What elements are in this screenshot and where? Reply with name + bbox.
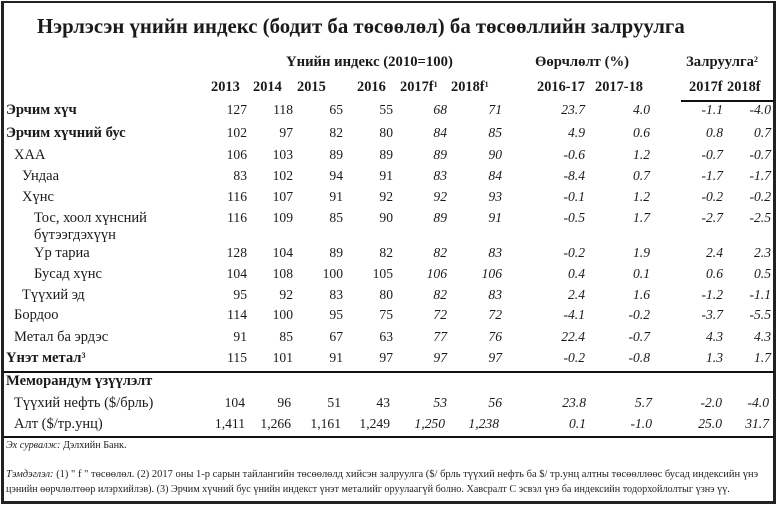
row: food — [22, 189, 771, 205]
row: metals and minerals: -0.7 — [628, 329, 650, 344]
row: fertilizer: 72 — [488, 307, 502, 322]
row: fertilizer: -3.7 — [701, 307, 723, 322]
row: other food: 0.4 — [568, 266, 585, 281]
row: crude oil — [14, 395, 769, 411]
row: energy: 118 — [273, 102, 293, 117]
row: metals and minerals: 91 — [233, 329, 247, 344]
row: raw materials: 80 — [379, 287, 393, 302]
row: other food: 105 — [373, 266, 393, 281]
title: Нэрлэсэн үнийн индекс (бодит ба төсөөлөл) ба төсөөллийн залруулга — [37, 15, 685, 38]
footer rule — [3, 436, 774, 438]
row: oils and meals: -0.5 — [563, 210, 585, 225]
row: non-energy: 80 — [379, 125, 393, 140]
row: non-energy: 0.6 — [633, 125, 650, 140]
row: precious metals: 101 — [273, 350, 293, 365]
row: fertilizer: Бордоо — [14, 307, 59, 323]
row: other food: 100 — [323, 266, 343, 281]
row: crude oil: 53 — [433, 395, 447, 410]
row: grains: 83 — [488, 245, 502, 260]
row: beverages: -8.4 — [563, 168, 585, 183]
row: crude oil: Түүхий нефть ($/брль) — [14, 395, 153, 411]
row: agriculture: -0.7 — [749, 147, 771, 162]
row: energy: 68 — [433, 102, 447, 117]
row: agriculture: 1.2 — [633, 147, 650, 162]
row: fertilizer: -5.5 — [749, 307, 771, 322]
header: revision: Залруулга2 — [686, 54, 758, 70]
row: other food: 104 — [227, 266, 247, 281]
revision header rule — [681, 100, 774, 102]
row: food: 116 — [227, 189, 247, 204]
row: memorandum heading: Меморандум үзүүлэлт — [6, 373, 152, 389]
row: gold: 1,249 — [359, 416, 390, 431]
row: metals and minerals: 22.4 — [561, 329, 585, 344]
row: other food: 0.6 — [706, 266, 723, 281]
row: raw materials: Түүхий эд — [22, 287, 85, 303]
row: crude oil: 43 — [376, 395, 390, 410]
row: other food: 0.1 — [633, 266, 650, 281]
year 2016: 2016 — [357, 79, 386, 95]
row: grains: 104 — [273, 245, 293, 260]
row: energy: Эрчим хүч — [6, 102, 77, 118]
row: precious metals: 97 — [433, 350, 447, 365]
row: oils and meals: 116 — [227, 210, 247, 225]
row: beverages: 0.7 — [633, 168, 650, 183]
row: non-energy — [6, 125, 772, 141]
row: grains: 2.3 — [754, 245, 771, 260]
row: oils and meals: 89 — [433, 210, 447, 225]
row: non-energy: Эрчим хүчний бус — [6, 125, 126, 141]
row: energy — [6, 102, 771, 118]
row: grains: 128 — [227, 245, 247, 260]
row: metals and minerals: 63 — [379, 329, 393, 344]
row: raw materials: 83 — [488, 287, 502, 302]
year 2013: 2013 — [211, 79, 240, 95]
row: raw materials: -1.2 — [701, 287, 723, 302]
footnotes — [6, 469, 758, 495]
year 2014: 2014 — [253, 79, 282, 95]
row: gold: 1,238 — [468, 416, 499, 431]
row: metals and minerals — [14, 329, 771, 345]
data table — [6, 102, 772, 366]
row: raw materials — [22, 287, 771, 303]
row: beverages: 84 — [488, 168, 502, 183]
row: beverages — [22, 168, 772, 184]
footnote line 2: цэнийн өөрчлөлтөөр илэрхийлэв). (3) Эрчим хүчний бус үнийн индекст үнэт металийг оруулаагүй болно. Хавсралт С эсвэл үнэ ба индексийн тодорхойлолтыг үзнэ үү. — [6, 484, 730, 495]
row: crude oil: 51 — [327, 395, 341, 410]
row: oils and meals — [34, 210, 771, 226]
row: energy: 65 — [329, 102, 343, 117]
row: beverages: -1.7 — [749, 168, 771, 183]
row: food: 93 — [488, 189, 502, 204]
row: fertilizer: 75 — [379, 307, 393, 322]
row: non-energy: 85 — [488, 125, 502, 140]
row: grains: 82 — [433, 245, 447, 260]
row: gold: 0.1 — [569, 416, 586, 431]
row: energy: 71 — [488, 102, 502, 117]
row: food: Хүнс — [22, 189, 54, 205]
period 2017-18: 2017-18 — [595, 79, 643, 95]
row: raw materials: 92 — [279, 287, 293, 302]
footnote line 1: Тэмдэглэл: (1) " f " төсөөлөл. (2) 2017 оны 1-р сарын тайлангийн төсөөлөлд хийсэн залруулга ($/ брль түүхий нефть ба $/ тр.унц алтны төсөөллөөс бусад индексийн үнэ — [6, 469, 758, 480]
year headers — [211, 79, 761, 95]
row: metals and minerals: 76 — [488, 329, 502, 344]
row: agriculture: -0.6 — [563, 147, 585, 162]
row: gold: 1,411 — [215, 416, 245, 431]
row: crude oil: 104 — [225, 395, 245, 410]
row: oils and meals: 91 — [488, 210, 502, 225]
row: beverages: 83 — [433, 168, 447, 183]
row: food: 1.2 — [633, 189, 650, 204]
row: beverages: -1.7 — [701, 168, 723, 183]
row: energy: 127 — [227, 102, 247, 117]
row: energy: 23.7 — [561, 102, 585, 117]
row: oils and meals: -2.7 — [701, 210, 723, 225]
source note: Эх сурвалж: Дэлхийн Банк. — [6, 440, 127, 451]
row: gold — [14, 416, 770, 432]
row: food: -0.2 — [749, 189, 771, 204]
row: non-energy: 97 — [279, 125, 293, 140]
row: precious metals: -0.2 — [563, 350, 585, 365]
row: non-energy: 82 — [329, 125, 343, 140]
row: precious metals: 1.3 — [706, 350, 723, 365]
row: precious metals — [6, 350, 772, 366]
row: non-energy: 0.7 — [754, 125, 771, 140]
row: agriculture: 89 — [433, 147, 447, 162]
row: beverages: 94 — [329, 168, 343, 183]
row: metals and minerals: 77 — [433, 329, 447, 344]
row label continuation: бүтээгдэхүүн — [34, 227, 116, 243]
row: gold: -1.0 — [630, 416, 652, 431]
revision 2017f: 2017f — [689, 79, 723, 95]
row: metals and minerals: 4.3 — [754, 329, 771, 344]
row: crude oil: 23.8 — [562, 395, 586, 410]
row: non-energy: 0.8 — [706, 125, 723, 140]
row: beverages: 91 — [379, 168, 393, 183]
row: beverages: 83 — [233, 168, 247, 183]
row: gold: Алт ($/тр.унц) — [14, 416, 103, 432]
row: other food: 108 — [273, 266, 293, 281]
row: raw materials: 2.4 — [568, 287, 585, 302]
row: oils and meals: 90 — [379, 210, 393, 225]
row: grains: -0.2 — [563, 245, 585, 260]
row: other food: 106 — [427, 266, 447, 281]
row: precious metals: Үнэт метал3 — [6, 350, 85, 366]
row: other food: 0.5 — [754, 266, 771, 281]
row: grains — [34, 245, 771, 261]
row: precious metals: 115 — [227, 350, 247, 365]
memorandum section — [6, 373, 770, 432]
row: food: 107 — [273, 189, 293, 204]
row: oils and meals: Тос, хоол хүнсний — [34, 210, 147, 226]
row: raw materials: 82 — [433, 287, 447, 302]
row: energy: -1.1 — [701, 102, 723, 117]
row: energy: 55 — [379, 102, 393, 117]
row: other food: Бусад хүнс — [34, 266, 102, 282]
row: precious metals: 97 — [379, 350, 393, 365]
row: other food: 106 — [482, 266, 502, 281]
row: gold: 1,161 — [310, 416, 341, 431]
row: raw materials: 95 — [233, 287, 247, 302]
row: gold: 31.7 — [745, 416, 769, 431]
row: precious metals: -0.8 — [628, 350, 650, 365]
row: oils and meals: 109 — [273, 210, 293, 225]
row: grains: 82 — [379, 245, 393, 260]
row: raw materials: 83 — [329, 287, 343, 302]
row: non-energy: 102 — [227, 125, 247, 140]
row: agriculture — [14, 147, 772, 163]
row: agriculture: 89 — [379, 147, 393, 162]
row: fertilizer — [14, 307, 771, 323]
row: food: -0.2 — [701, 189, 723, 204]
row: non-energy: 4.9 — [568, 125, 585, 140]
row: oils and meals: 85 — [329, 210, 343, 225]
row: beverages: Ундаа — [22, 168, 59, 184]
row: food: 91 — [329, 189, 343, 204]
row: metals and minerals: 85 — [279, 329, 293, 344]
row: food: 92 — [433, 189, 447, 204]
row: fertilizer: 114 — [227, 307, 247, 322]
row: oils and meals: 1.7 — [633, 210, 650, 225]
row: fertilizer: 72 — [433, 307, 447, 322]
row: agriculture: ХАА — [14, 147, 45, 163]
row: raw materials: 1.6 — [633, 287, 650, 302]
year 2017f: 2017f1 — [400, 79, 438, 95]
row: raw materials: -1.1 — [749, 287, 771, 302]
row: grains: 2.4 — [706, 245, 723, 260]
row: fertilizer: -4.1 — [563, 307, 585, 322]
row: energy: 4.0 — [633, 102, 650, 117]
row: metals and minerals: Метал ба эрдэс — [14, 329, 108, 345]
row: beverages: 102 — [273, 168, 293, 183]
row: crude oil: -4.0 — [747, 395, 769, 410]
row: precious metals: 1.7 — [754, 350, 771, 365]
year 2018f: 2018f1 — [451, 79, 489, 95]
row: energy: -4.0 — [749, 102, 771, 117]
row: crude oil: 5.7 — [635, 395, 652, 410]
row: fertilizer: -0.2 — [628, 307, 650, 322]
row: gold: 1,250 — [414, 416, 445, 431]
row: grains: 89 — [329, 245, 343, 260]
row: other food — [34, 266, 771, 282]
column group headers — [286, 54, 758, 70]
revision 2018f: 2018f — [727, 79, 761, 95]
row: oils and meals: -2.5 — [749, 210, 771, 225]
row: agriculture: -0.7 — [701, 147, 723, 162]
row: gold: 25.0 — [698, 416, 722, 431]
row: crude oil: 96 — [277, 395, 291, 410]
row: agriculture: 89 — [329, 147, 343, 162]
header: change: Өөрчлөлт (%) — [535, 54, 629, 70]
row: agriculture: 103 — [273, 147, 293, 162]
row: grains: Үр тариа — [34, 245, 90, 261]
header: price index: Үнийн индекс (2010=100) — [286, 54, 453, 70]
year 2015: 2015 — [297, 79, 326, 95]
row: precious metals: 91 — [329, 350, 343, 365]
row: gold: 1,266 — [260, 416, 291, 431]
row: food: 92 — [379, 189, 393, 204]
row: agriculture: 90 — [488, 147, 502, 162]
row: precious metals: 97 — [488, 350, 502, 365]
row: grains: 1.9 — [633, 245, 650, 260]
row: fertilizer: 100 — [273, 307, 293, 322]
row: crude oil: -2.0 — [700, 395, 722, 410]
period 2016-17: 2016-17 — [537, 79, 585, 95]
row: metals and minerals: 4.3 — [706, 329, 723, 344]
row: food: -0.1 — [563, 189, 585, 204]
row: agriculture: 106 — [227, 147, 247, 162]
row: fertilizer: 95 — [329, 307, 343, 322]
memorandum rule — [3, 371, 774, 373]
row: non-energy: 84 — [433, 125, 447, 140]
row: crude oil: 56 — [488, 395, 502, 410]
row: metals and minerals: 67 — [329, 329, 343, 344]
